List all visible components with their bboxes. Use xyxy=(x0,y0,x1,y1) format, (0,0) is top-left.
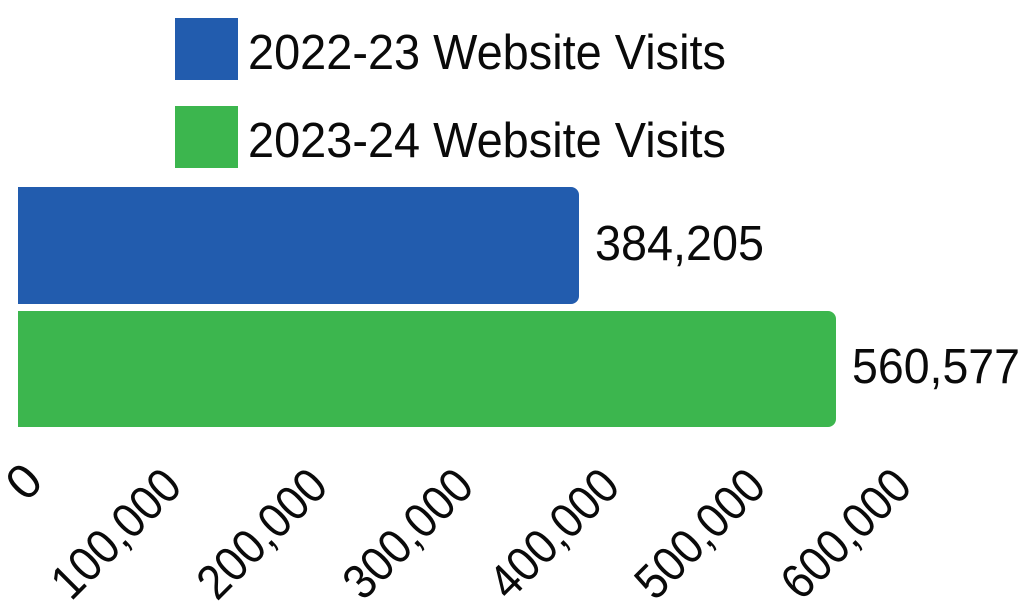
x axis labels: 200,000 xyxy=(187,458,338,610)
x axis labels: 600,000 xyxy=(771,458,922,610)
legend item: 2022-23: 2022-23 Website Visits xyxy=(248,26,726,80)
x axis labels xyxy=(0,453,922,610)
value label: 560,577: 560,577 xyxy=(852,340,1020,394)
bar: 2023-24 xyxy=(18,311,836,427)
legend xyxy=(175,18,726,168)
x axis labels: 300,000 xyxy=(333,458,484,610)
bar: 2022-23 xyxy=(18,187,579,304)
x axis labels: 100,000 xyxy=(41,458,192,610)
value label: 384,205: 384,205 xyxy=(595,217,764,271)
x axis labels: 400,000 xyxy=(479,458,630,610)
x axis labels: 500,000 xyxy=(625,458,776,610)
legend item: 2023-24: 2023-24 Website Visits xyxy=(248,114,726,168)
